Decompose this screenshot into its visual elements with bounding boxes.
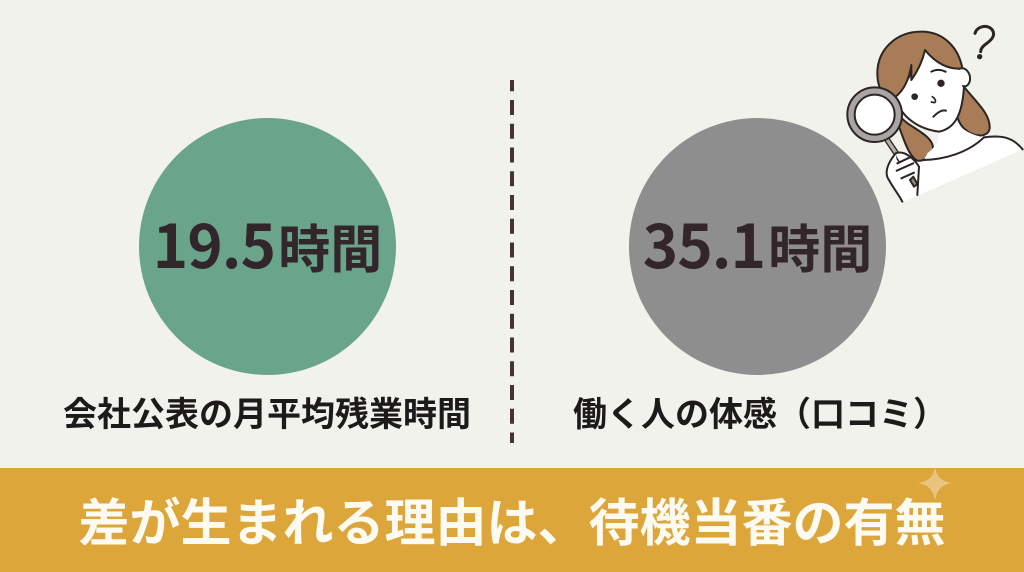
panel: left metric circle <box>139 118 396 375</box>
dashed divider <box>510 80 514 443</box>
banner text: 差が生まれる理由は、待機当番の有無 <box>78 482 946 556</box>
icon: sparkle <box>918 467 952 500</box>
icon: woman with magnifying glass <box>846 24 1024 203</box>
left caption: 会社公表の月平均残業時間 <box>63 387 471 436</box>
right caption: 働く人の体感（口コミ） <box>573 387 947 436</box>
left value: 19.5時間 <box>153 199 382 286</box>
panel: conclusion banner <box>0 468 1024 572</box>
right value: 35.1時間 <box>643 199 872 286</box>
panel: right metric circle <box>629 118 886 375</box>
